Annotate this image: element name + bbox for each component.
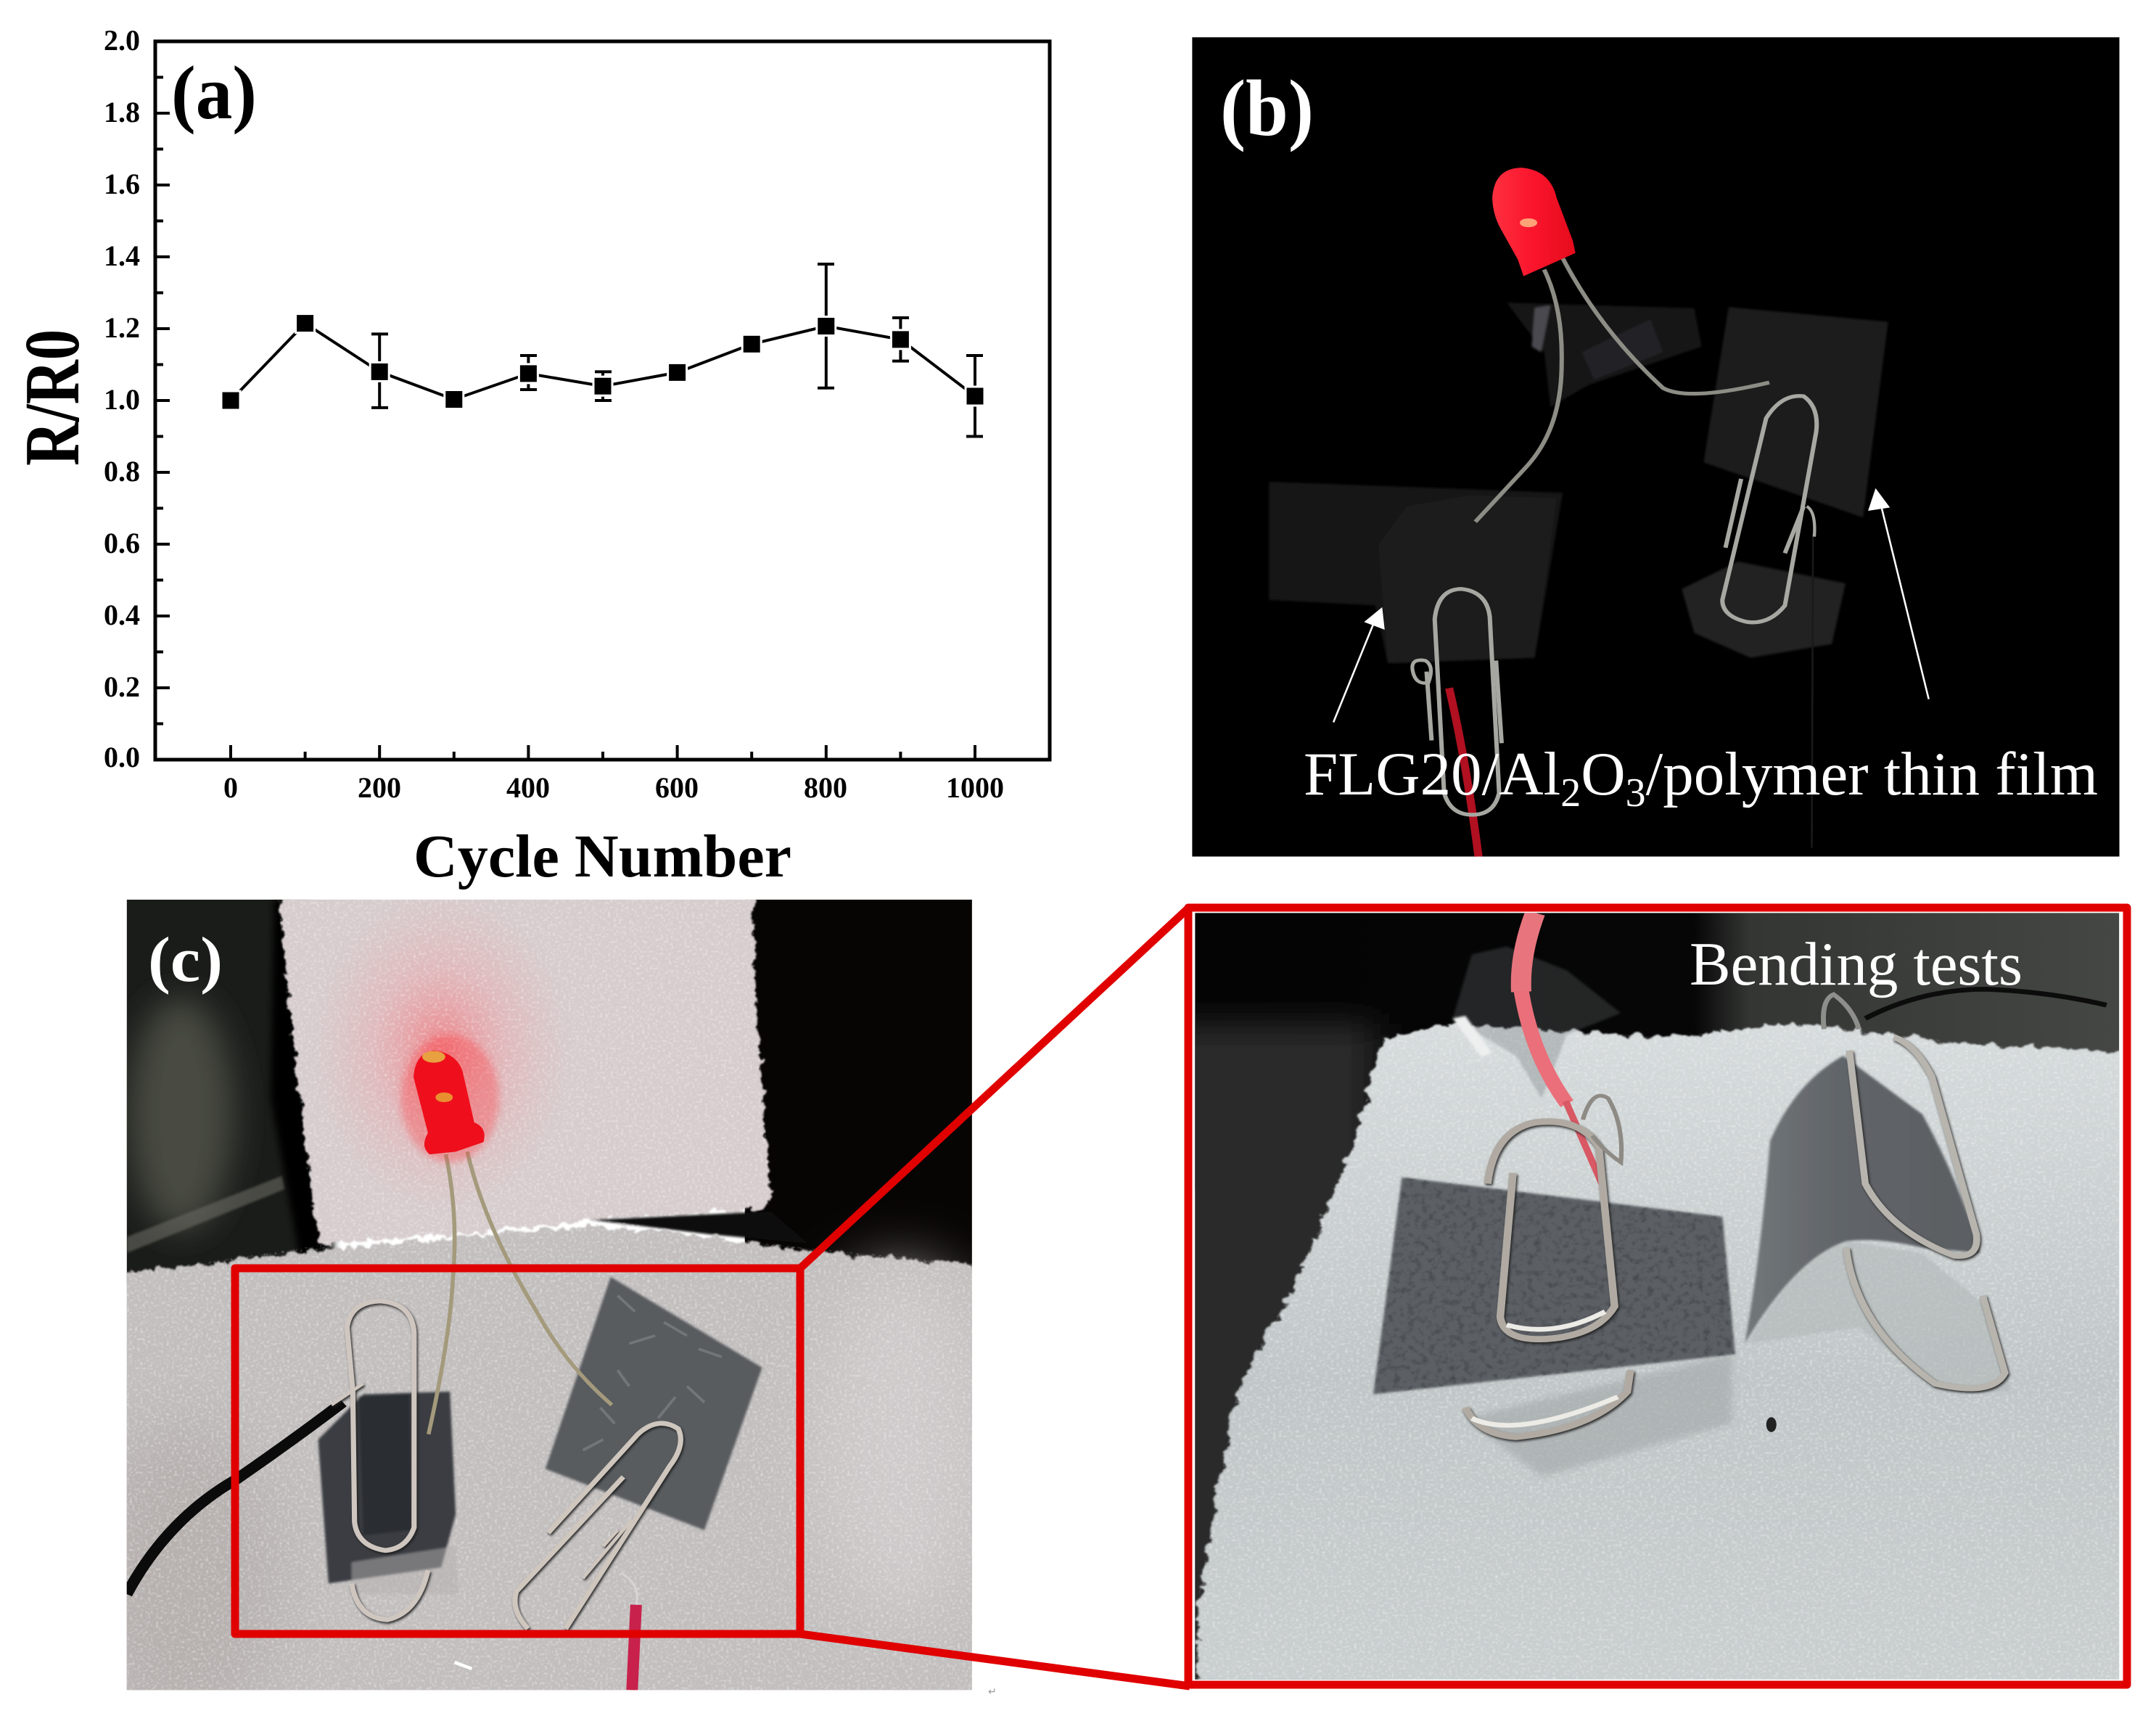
clip loop on wire: [1583, 1096, 1621, 1162]
black wire behind clip: [1865, 989, 2107, 1019]
paperclip left: [1412, 589, 1502, 815]
LED wires: [429, 1151, 612, 1434]
curved film paperclip: [1846, 1037, 2005, 1389]
caption: bending tests: Bending tests: [1690, 930, 2023, 998]
paperclip left: [332, 1301, 428, 1619]
dark background right: [745, 900, 972, 1273]
y axis tick labels: 1.0: [104, 383, 140, 416]
plastic streak: [127, 1175, 285, 1253]
x axis title: Cycle Number: [413, 823, 791, 890]
y axis tick labels: 1.2: [104, 311, 140, 344]
red LED light on foam: [308, 885, 575, 1216]
dark speck: [1766, 1417, 1777, 1432]
left film: [1269, 482, 1563, 663]
x axis tick labels: 0: [223, 771, 238, 804]
x axis tick labels: 400: [506, 771, 550, 804]
foam speckle texture: [127, 900, 972, 1690]
caption: film material: 2: [1560, 771, 1581, 816]
y axis tick labels: [104, 24, 140, 773]
panel label a: (a): [171, 50, 257, 135]
y axis ticks: [155, 41, 170, 760]
x axis tick labels: 600: [655, 771, 699, 804]
y axis tick labels: 1.4: [104, 239, 140, 272]
caption: film material: O: [1581, 740, 1626, 808]
right film: [546, 1277, 762, 1530]
caption: film material: FLG20/Al: [1304, 740, 1560, 808]
LED: [1492, 168, 1576, 276]
data markers: [221, 314, 984, 410]
panel: (b) photo of LED on black background: [1192, 37, 2120, 857]
data line: [231, 324, 975, 401]
connector lines: [800, 907, 1190, 1686]
panel: (c) photo of LED on foam: [86, 874, 1011, 1721]
y axis tick labels: 0.0: [104, 741, 140, 773]
foam speckle texture: [1195, 913, 2119, 1680]
foam surface: [1195, 1024, 2156, 1721]
photo background: [1192, 37, 2120, 857]
pink wire: [1521, 913, 1602, 1183]
panel: (a) line chart of R/R0 against cycle number: [9, 24, 1050, 890]
shiny clip highlights: [1472, 1312, 1618, 1425]
y axis tick labels: 1.6: [104, 168, 140, 200]
arrow to left film: [1333, 607, 1385, 722]
caption: film material: 3: [1626, 771, 1646, 816]
red wire: [1449, 688, 1478, 857]
x axis tick labels: 200: [358, 771, 401, 804]
dark background top: [1195, 913, 2119, 1190]
y axis tick labels: 1.8: [104, 96, 140, 128]
transparent tape top: [1452, 946, 1621, 1098]
paperclip right: [1722, 396, 1816, 623]
flat film: [1373, 1178, 1735, 1395]
paperclip right: [515, 1424, 680, 1629]
y axis tick labels: 0.6: [104, 527, 140, 559]
right film: [1703, 307, 1888, 517]
stray return mark: ↵: [988, 1687, 997, 1698]
flat film texture: [1373, 1178, 1735, 1395]
red magnified frame: [1188, 908, 2127, 1685]
y axis tick labels: 0.4: [104, 599, 140, 631]
upper tape: [1507, 303, 1702, 407]
red selection box: [235, 1268, 800, 1634]
x axis tick labels: 800: [804, 771, 847, 804]
panel: (d) magnified bending test photo: [1123, 913, 2156, 1721]
greenish reflection patch: [129, 997, 233, 1232]
plot frame: [155, 41, 1050, 760]
thin black wire: [1812, 534, 1813, 847]
caption: film material: /polymer thin film: [1646, 740, 2098, 808]
foam bright patch: [820, 1269, 982, 1621]
panel label c: (c): [148, 925, 223, 995]
film speckle: [583, 1296, 722, 1450]
magnifier: red box in photo c, frame and connecting lines: [235, 907, 2127, 1686]
curved film: [1745, 1056, 2011, 1392]
LED wires: [1476, 258, 1769, 522]
y axis tick labels: 0.2: [104, 670, 140, 703]
red wire: [632, 1605, 636, 1690]
panel label b: (b): [1220, 64, 1314, 152]
shadow under film: [1465, 1355, 1732, 1477]
white fleck: [455, 1662, 472, 1669]
foam gap shadow: [591, 1212, 808, 1244]
LED: [400, 1035, 499, 1162]
lower foam block: [86, 1226, 1011, 1721]
foam shadow patch: [86, 1418, 282, 1721]
upper foam block: [278, 874, 771, 1245]
x axis tick labels: [223, 771, 1004, 804]
dark background left: [127, 900, 318, 1283]
y axis title: R/R0: [9, 329, 96, 466]
y axis tick labels: 0.8: [104, 455, 140, 488]
x axis tick labels: 1000: [946, 771, 1004, 804]
x axis ticks: [231, 745, 975, 760]
error bars: [371, 264, 983, 437]
clip loop top: [1824, 995, 1859, 1029]
black wire: [127, 1402, 343, 1594]
flat film paperclip: [1465, 1122, 1631, 1437]
left film: [318, 1392, 458, 1594]
y axis tick labels: 2.0: [104, 24, 140, 57]
dark background left: [1123, 1024, 1377, 1721]
lower tape: [1682, 562, 1846, 658]
black edge beside foam: [271, 900, 334, 1258]
arrow to right film: [1868, 488, 1929, 699]
